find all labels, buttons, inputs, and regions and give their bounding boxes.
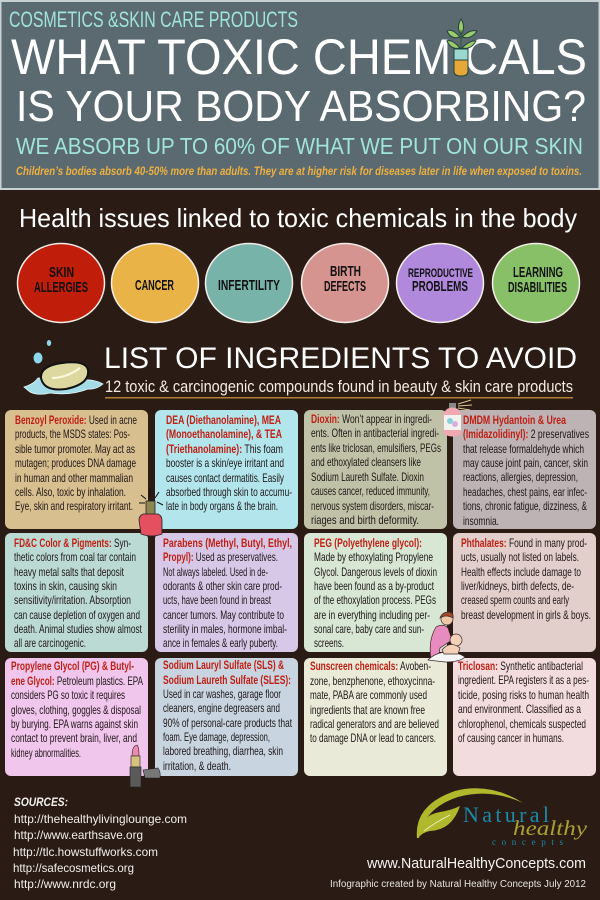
- panel: sunscreen chemicals: zone, benzphenone, ethoxycinna-: [310, 674, 435, 688]
- panel: sodium lauryl sulfate: irritation, & death.: [163, 759, 231, 773]
- logo: Natural Healthy Concepts: healthy: [513, 816, 588, 840]
- health issue circles: LEARNING: [513, 264, 563, 281]
- panel: DEA MEA TEA: (Triethanolamine): This foam: [166, 442, 283, 456]
- header panel: [0, 1, 600, 189]
- panel: sunscreen chemicals: ingredients that are known free: [310, 703, 425, 717]
- panel: sodium lauryl sulfate: cleaners, engine degreasers and: [163, 701, 280, 715]
- icon: lipstick: [130, 745, 160, 787]
- website url: www.NaturalHealthyConcepts.com: [366, 855, 586, 872]
- panel: PEG: screens.: [314, 636, 344, 650]
- panel: propylene glycol: by burying. EPA warns against skin: [11, 717, 138, 731]
- panel: DMDM hydantoin: insomnia.: [463, 514, 499, 528]
- panel: PEG: of the ethoxylation process. PEGs: [314, 593, 436, 607]
- panel: FD&C colors: toxins in skin, causing skin: [14, 579, 117, 593]
- health issue circles: PROBLEMS: [412, 278, 468, 295]
- panel: parabens: cancer tumors. May contribute to: [163, 608, 284, 622]
- panel: propylene glycol: Propylene Glycol (PG) & Butyl-: [11, 659, 134, 673]
- panel: DEA MEA TEA: [155, 410, 298, 529]
- panel: PEG: Made by ethoxylating Propylene: [314, 550, 433, 564]
- panel: dioxin: ents. Often in antibacterial ingredi-: [311, 426, 439, 440]
- panel: propylene glycol: contact to prevent brain, liver, and: [11, 731, 137, 745]
- panel: propylene glycol: kidney abnormalities.: [11, 746, 81, 760]
- panel: propylene glycol: [5, 658, 148, 776]
- panel: dioxin: ents like triclosan, emulsifiers, PEGs: [311, 441, 441, 455]
- panel: parabens: ucts, have been found in breast: [163, 593, 271, 607]
- panel: dioxin: nervous system disorders, miscar-: [311, 499, 434, 513]
- panel: sodium lauryl sulfate: labored breathing, diarrhea, skin: [163, 744, 283, 758]
- panel: dioxin: Dioxin: Won’t appear in ingredi-: [311, 412, 432, 426]
- heading: list of ingredients: LIST OF INGREDIENTS TO AVOID: [104, 342, 577, 375]
- panel: sodium lauryl sulfate: [155, 658, 298, 776]
- panel: benzoyl peroxide: Eye, skin and respiratory irritant.: [15, 499, 133, 513]
- panel: FD&C colors: all are carcinogenic.: [14, 636, 86, 650]
- panel: DEA MEA TEA: booster is a skin/eye irritant and: [166, 456, 284, 470]
- health issue circles: ALLERGIES: [34, 279, 88, 296]
- icon: wet soap bar: [24, 340, 103, 394]
- panel: triclosan: [453, 658, 596, 776]
- panel: DEA MEA TEA: DEA (Diethanolamine), MEA: [166, 413, 281, 427]
- sources block: http://thehealthylivinglounge.com: [14, 812, 187, 826]
- panel: PEG: Glycol. Dangerous levels of dioxin: [314, 565, 437, 579]
- panel: DEA MEA TEA: late in body organs & the brain.: [166, 499, 278, 513]
- panel: parabens: odorants & other skin care prod-: [163, 579, 282, 593]
- health issue circles: CANCER: [135, 277, 174, 294]
- panel: benzoyl peroxide: sible tumor promoter. May act as: [15, 442, 135, 456]
- panel: PEG: sonal care, baby care and sun-: [314, 622, 424, 636]
- panel: dioxin: riages and birth deformity.: [311, 513, 419, 527]
- panel: benzoyl peroxide: in human and other mammalian: [15, 471, 133, 485]
- panel: FD&C colors: heavy metal salts that deposit: [14, 565, 124, 579]
- panel: FD&C colors: [5, 533, 148, 652]
- sources block: http://safecosmetics.org: [13, 861, 134, 875]
- panel: benzoyl peroxide: products, the MSDS states: Pos-: [15, 427, 130, 441]
- panel: DEA MEA TEA: absorbed through skin to accumu-: [166, 485, 292, 499]
- sources block: http://www.earthsave.org: [14, 828, 143, 842]
- panel: propylene glycol: gloves, clothing, goggles & disposal: [11, 703, 141, 717]
- sources block: [13, 795, 187, 891]
- panel: DEA MEA TEA: causes contact dermatitis. Easily: [166, 471, 284, 485]
- heading: health issues: Health issues linked to toxic chemicals in the body: [19, 203, 577, 233]
- logo: Natural Healthy Concepts: concepts: [492, 837, 563, 847]
- panel: sunscreen chemicals: [304, 658, 447, 776]
- sources heading: SOURCES:: [14, 795, 68, 809]
- panel: propylene glycol: considers PG so toxic it requires: [11, 688, 125, 702]
- panel: dioxin: Sodium Laureth Sulfate. Dioxin: [311, 470, 424, 484]
- logo: Natural Healthy Concepts: [417, 788, 588, 847]
- panel: parabens: Parabens (Methyl, Butyl, Ethyl,: [163, 536, 292, 550]
- panel: sodium lauryl sulfate: Sodium Laureth Sulfate (SLES):: [163, 673, 291, 687]
- panel: parabens: ance in females & early puberty.: [163, 636, 278, 650]
- panel: sunscreen chemicals: Sunscreen chemicals: Avoben-: [310, 659, 431, 673]
- panel: sodium lauryl sulfate: foam. Eye damage, depression,: [163, 730, 270, 744]
- panel: FD&C colors: sensitivity/irritation. Absorption: [14, 593, 131, 607]
- panel: PEG: [304, 533, 447, 652]
- credit line: Infographic created by Natural Healthy Concepts July 2012: [330, 879, 586, 890]
- panel: FD&C colors: thetic colors from coal tar contain: [14, 550, 136, 564]
- panel: PEG: PEG (Polyethylene glycol):: [314, 536, 422, 550]
- panel: PEG: have been found as a by-product: [314, 579, 434, 593]
- health issue circles: DEFECTS: [324, 278, 366, 295]
- panel: benzoyl peroxide: Benzoyl Peroxide: Used in acne: [15, 413, 137, 427]
- panel: parabens: [155, 533, 298, 652]
- icon: mother bathing baby: [428, 612, 465, 662]
- panel: FD&C colors: death. Animal studies show almost: [14, 622, 142, 636]
- panel: PEG: are in everything including per-: [314, 608, 430, 622]
- icon: plant in test tube: [447, 19, 477, 76]
- sources block: http://www.nrdc.org: [14, 877, 116, 891]
- health issue circles: REPRODUCTIVE: [408, 266, 473, 280]
- panel: FD&C colors: can cause depletion of oxygen and: [14, 608, 140, 622]
- panel: dioxin: [304, 410, 447, 529]
- panel: sunscreen chemicals: to damage DNA or lead to cancers.: [310, 731, 436, 745]
- panel: DMDM hydantoin: [453, 410, 596, 529]
- panel: dioxin: and ethoxylated cleansers like: [311, 455, 421, 469]
- health issue circles: SKIN: [49, 264, 74, 281]
- panel: parabens: Propyl): Used as preservatives.: [163, 550, 278, 564]
- panel: benzoyl peroxide: cells. Also, toxic by inhalation.: [15, 485, 126, 499]
- panel: FD&C colors: FD&C Color & Pigments: Syn-: [14, 536, 131, 550]
- icon: nail polish bottle: [139, 489, 163, 536]
- panel: sodium lauryl sulfate: Used in car washes, garage floor: [163, 687, 281, 701]
- health issue circles: [18, 244, 580, 322]
- panel: sunscreen chemicals: mate, PABA are commonly used: [310, 688, 427, 702]
- panel: phthalates: [453, 533, 596, 652]
- panel: benzoyl peroxide: [5, 410, 148, 529]
- panel: DEA MEA TEA: (Monoethanolamine), & TEA: [166, 427, 282, 441]
- kicker: cosmetics and skin care products: COSMETICS &SKIN CARE PRODUCTS: [9, 7, 298, 32]
- panel: sodium lauryl sulfate: 90% of personal-care products that: [163, 716, 292, 730]
- panel: sunscreen chemicals: radical generators and are believed: [310, 717, 439, 731]
- logo: Natural Healthy Concepts: Natural: [463, 802, 549, 827]
- panel: sodium lauryl sulfate: Sodium Lauryl Sulfate (SLS) &: [163, 658, 284, 672]
- panel: parabens: sterility in males, hormone imbal-: [163, 622, 287, 636]
- panel: propylene glycol: ene Glycol: Petroleum plastics. EPA: [11, 674, 143, 688]
- sources block: http://tlc.howstuffworks.com: [13, 845, 158, 859]
- health issue circles: INFERTILITY: [218, 277, 280, 294]
- panel: benzoyl peroxide: mutagen; produces DNA damage: [15, 456, 136, 470]
- panel: parabens: Not always labeled. Used in de-: [163, 565, 268, 579]
- health issue circles: BIRTH: [330, 263, 361, 280]
- icon: spray bottle: [443, 400, 472, 436]
- panel: dioxin: causes cancer, reduced immunity,: [311, 484, 430, 498]
